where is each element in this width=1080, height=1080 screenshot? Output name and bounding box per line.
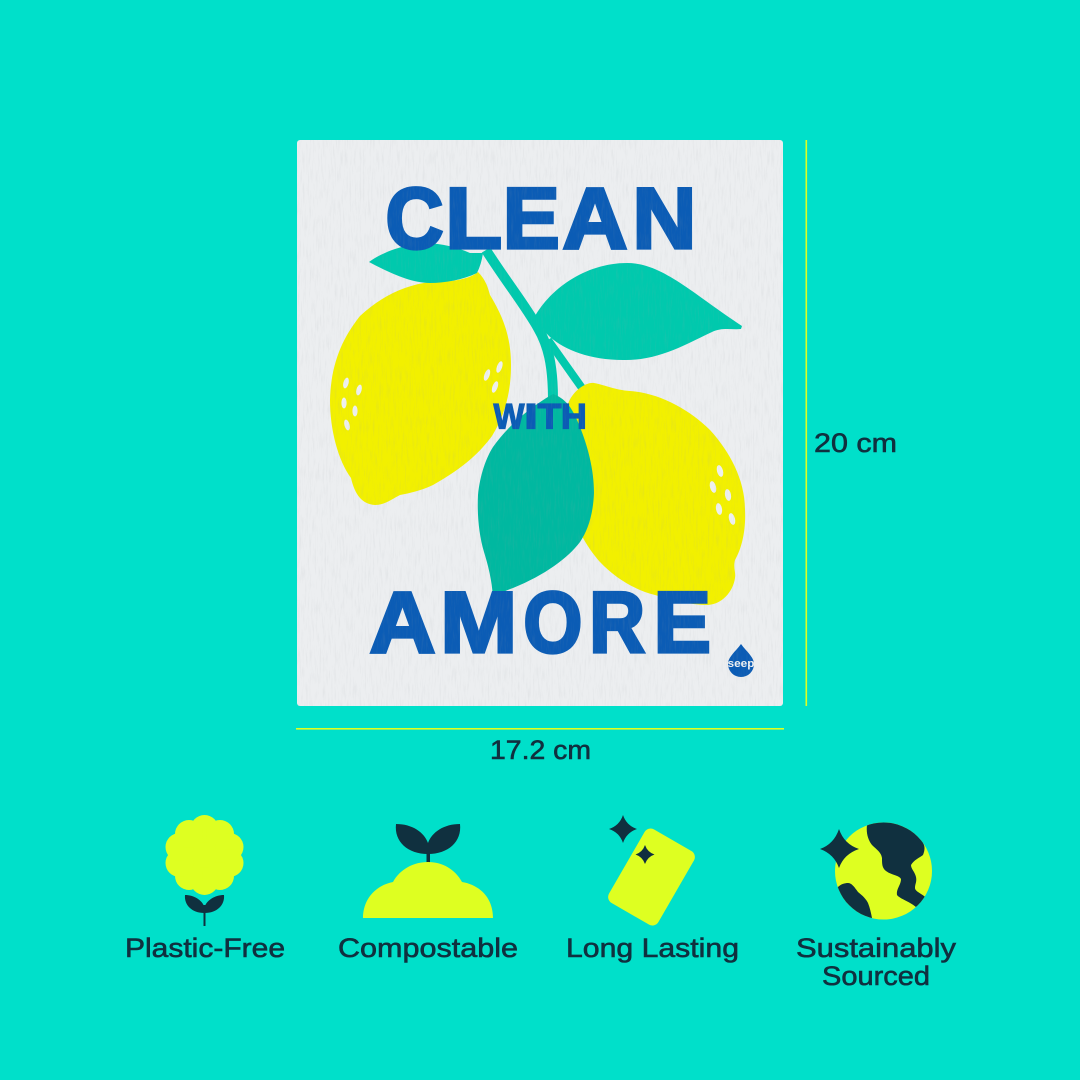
icon: earth with sparkle [820, 822, 932, 920]
heading: CLEAN [386, 171, 696, 267]
heading: AMORE: A [370, 575, 436, 671]
heading: WITH: W [494, 398, 524, 436]
label: Long Lasting: Long Lasting [566, 933, 739, 963]
heading: WITH: H [561, 398, 587, 436]
heading: CLEAN: E [503, 171, 560, 267]
label: Sustainably Sourced: Sustainably [796, 933, 957, 963]
label: Plastic-Free: Plastic-Free [125, 933, 285, 963]
heading: AMORE: M [440, 575, 517, 671]
icon: flower, plastic-free [166, 815, 244, 926]
heading: AMORE [370, 575, 711, 671]
heading: CLEAN: N [632, 171, 696, 267]
heading: AMORE: E [654, 575, 711, 671]
heading: AMORE: R [589, 575, 645, 671]
lemon seeds left [341, 360, 504, 431]
heading: CLEAN: C [386, 171, 444, 267]
leaf: top left [369, 243, 483, 283]
left lemon [330, 272, 511, 505]
cloth texture [297, 140, 783, 706]
panel: sponge cloth product [297, 140, 783, 706]
logo: seep drop [728, 644, 755, 677]
leaf: top right [533, 263, 742, 360]
icon: sparkling cloth [606, 815, 697, 928]
lemon seeds right [709, 464, 736, 526]
heading: WITH: I [524, 398, 538, 436]
heading: CLEAN: A [562, 171, 628, 267]
branch stems [486, 250, 582, 400]
icon: sprout on compost mound [363, 824, 493, 918]
label: Compostable: Compostable [338, 933, 518, 963]
leaf: centre [478, 394, 594, 598]
dimension: width line [296, 728, 784, 730]
dimension: width label: 17.2 cm [490, 735, 591, 765]
logo: seep drop: seep [728, 658, 755, 670]
dimension: height label: 20 cm [814, 428, 897, 458]
right lemon [563, 383, 745, 605]
heading: CLEAN: L [445, 171, 502, 267]
heading: WITH: T [538, 398, 561, 436]
label: Sustainably Sourced: Sourced [822, 961, 930, 991]
heading: AMORE: O [523, 575, 582, 671]
cloth base [297, 140, 783, 706]
label: Sustainably Sourced [796, 933, 957, 991]
heading: WITH [494, 398, 587, 436]
dimension: height line [806, 140, 807, 706]
